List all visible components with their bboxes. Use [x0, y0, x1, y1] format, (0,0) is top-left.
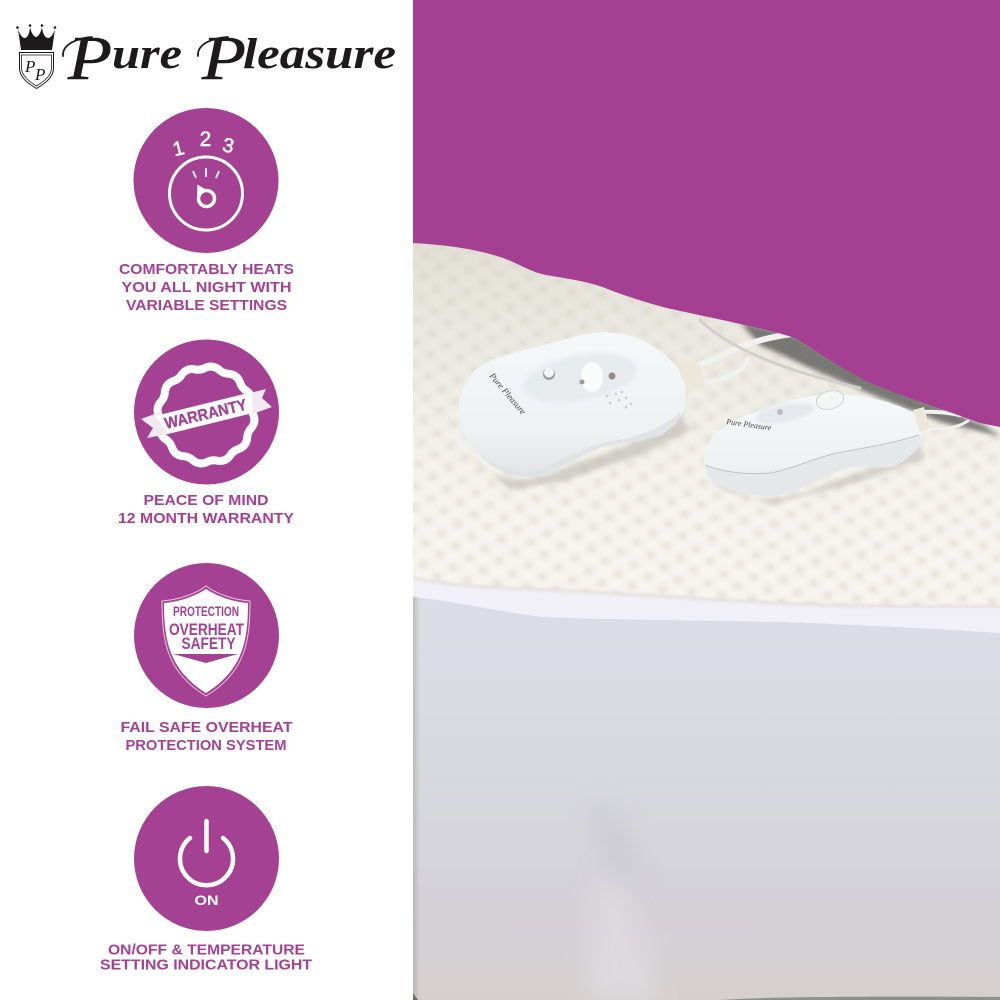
icon: crown and crest: [16, 24, 56, 89]
panel: warranty: [118, 340, 294, 527]
small remote control: [704, 388, 930, 505]
caption: [118, 492, 294, 527]
remote brand text: Pure Pleasure: [487, 370, 528, 416]
quilted mattress topper: [413, 243, 1000, 628]
shadow beneath sheet: [740, 322, 1000, 436]
icon: power button: ON: [194, 892, 218, 908]
caption: 12 MONTH WARRANTY: [118, 510, 294, 527]
caption: [100, 942, 312, 974]
cable collar: [678, 362, 705, 390]
panel: variable heat settings: [119, 108, 294, 314]
caption: [120, 719, 292, 754]
icon: safety shield: SAFETY: [182, 634, 236, 653]
caption: VARIABLE SETTINGS: [126, 297, 287, 314]
fitted white skirt: [413, 578, 1000, 1000]
wordmark: [63, 25, 396, 93]
icon: safety shield: [134, 563, 279, 708]
icon: heat dial: [134, 108, 278, 253]
caption: [119, 261, 294, 314]
caption: FAIL SAFE OVERHEAT: [120, 719, 292, 736]
icon: power button: [134, 786, 279, 931]
panel: product photo: [400, 0, 1000, 1000]
icon: warranty seal: WARRANTY: [163, 397, 249, 433]
caption: PROTECTION SYSTEM: [126, 737, 286, 754]
panel: on/off indicator: [100, 786, 312, 974]
cables: [680, 320, 968, 429]
wordmark: P: [201, 25, 246, 93]
wordmark: ure: [112, 31, 182, 78]
large remote control: [459, 332, 705, 490]
wordmark: P: [67, 25, 112, 93]
purple sheet: [413, 0, 1000, 427]
icon: safety shield: PROTECTION: [173, 603, 239, 619]
small remote brand text: Pure Pleasure: [725, 417, 772, 432]
icon: crown and crest: P: [24, 57, 35, 76]
wordmark: leasure: [243, 31, 396, 78]
caption: SETTING INDICATOR LIGHT: [100, 956, 312, 974]
panel: overheat protection: [120, 563, 292, 754]
icon: heat dial: 2: [200, 128, 211, 151]
caption: YOU ALL NIGHT WITH: [122, 279, 292, 296]
caption: COMFORTABLY HEATS: [119, 261, 294, 278]
logo: Pure Pleasure: [16, 24, 396, 93]
icon: crown and crest: P: [34, 65, 45, 84]
caption: PEACE OF MIND: [144, 492, 269, 509]
caption: ON/OFF & TEMPERATURE: [108, 942, 305, 958]
icon: warranty seal: [134, 340, 279, 484]
icon: heat dial: 1: [170, 137, 187, 161]
icon: safety shield: OVERHEAT: [169, 620, 244, 639]
icon: heat dial: 3: [221, 134, 236, 158]
